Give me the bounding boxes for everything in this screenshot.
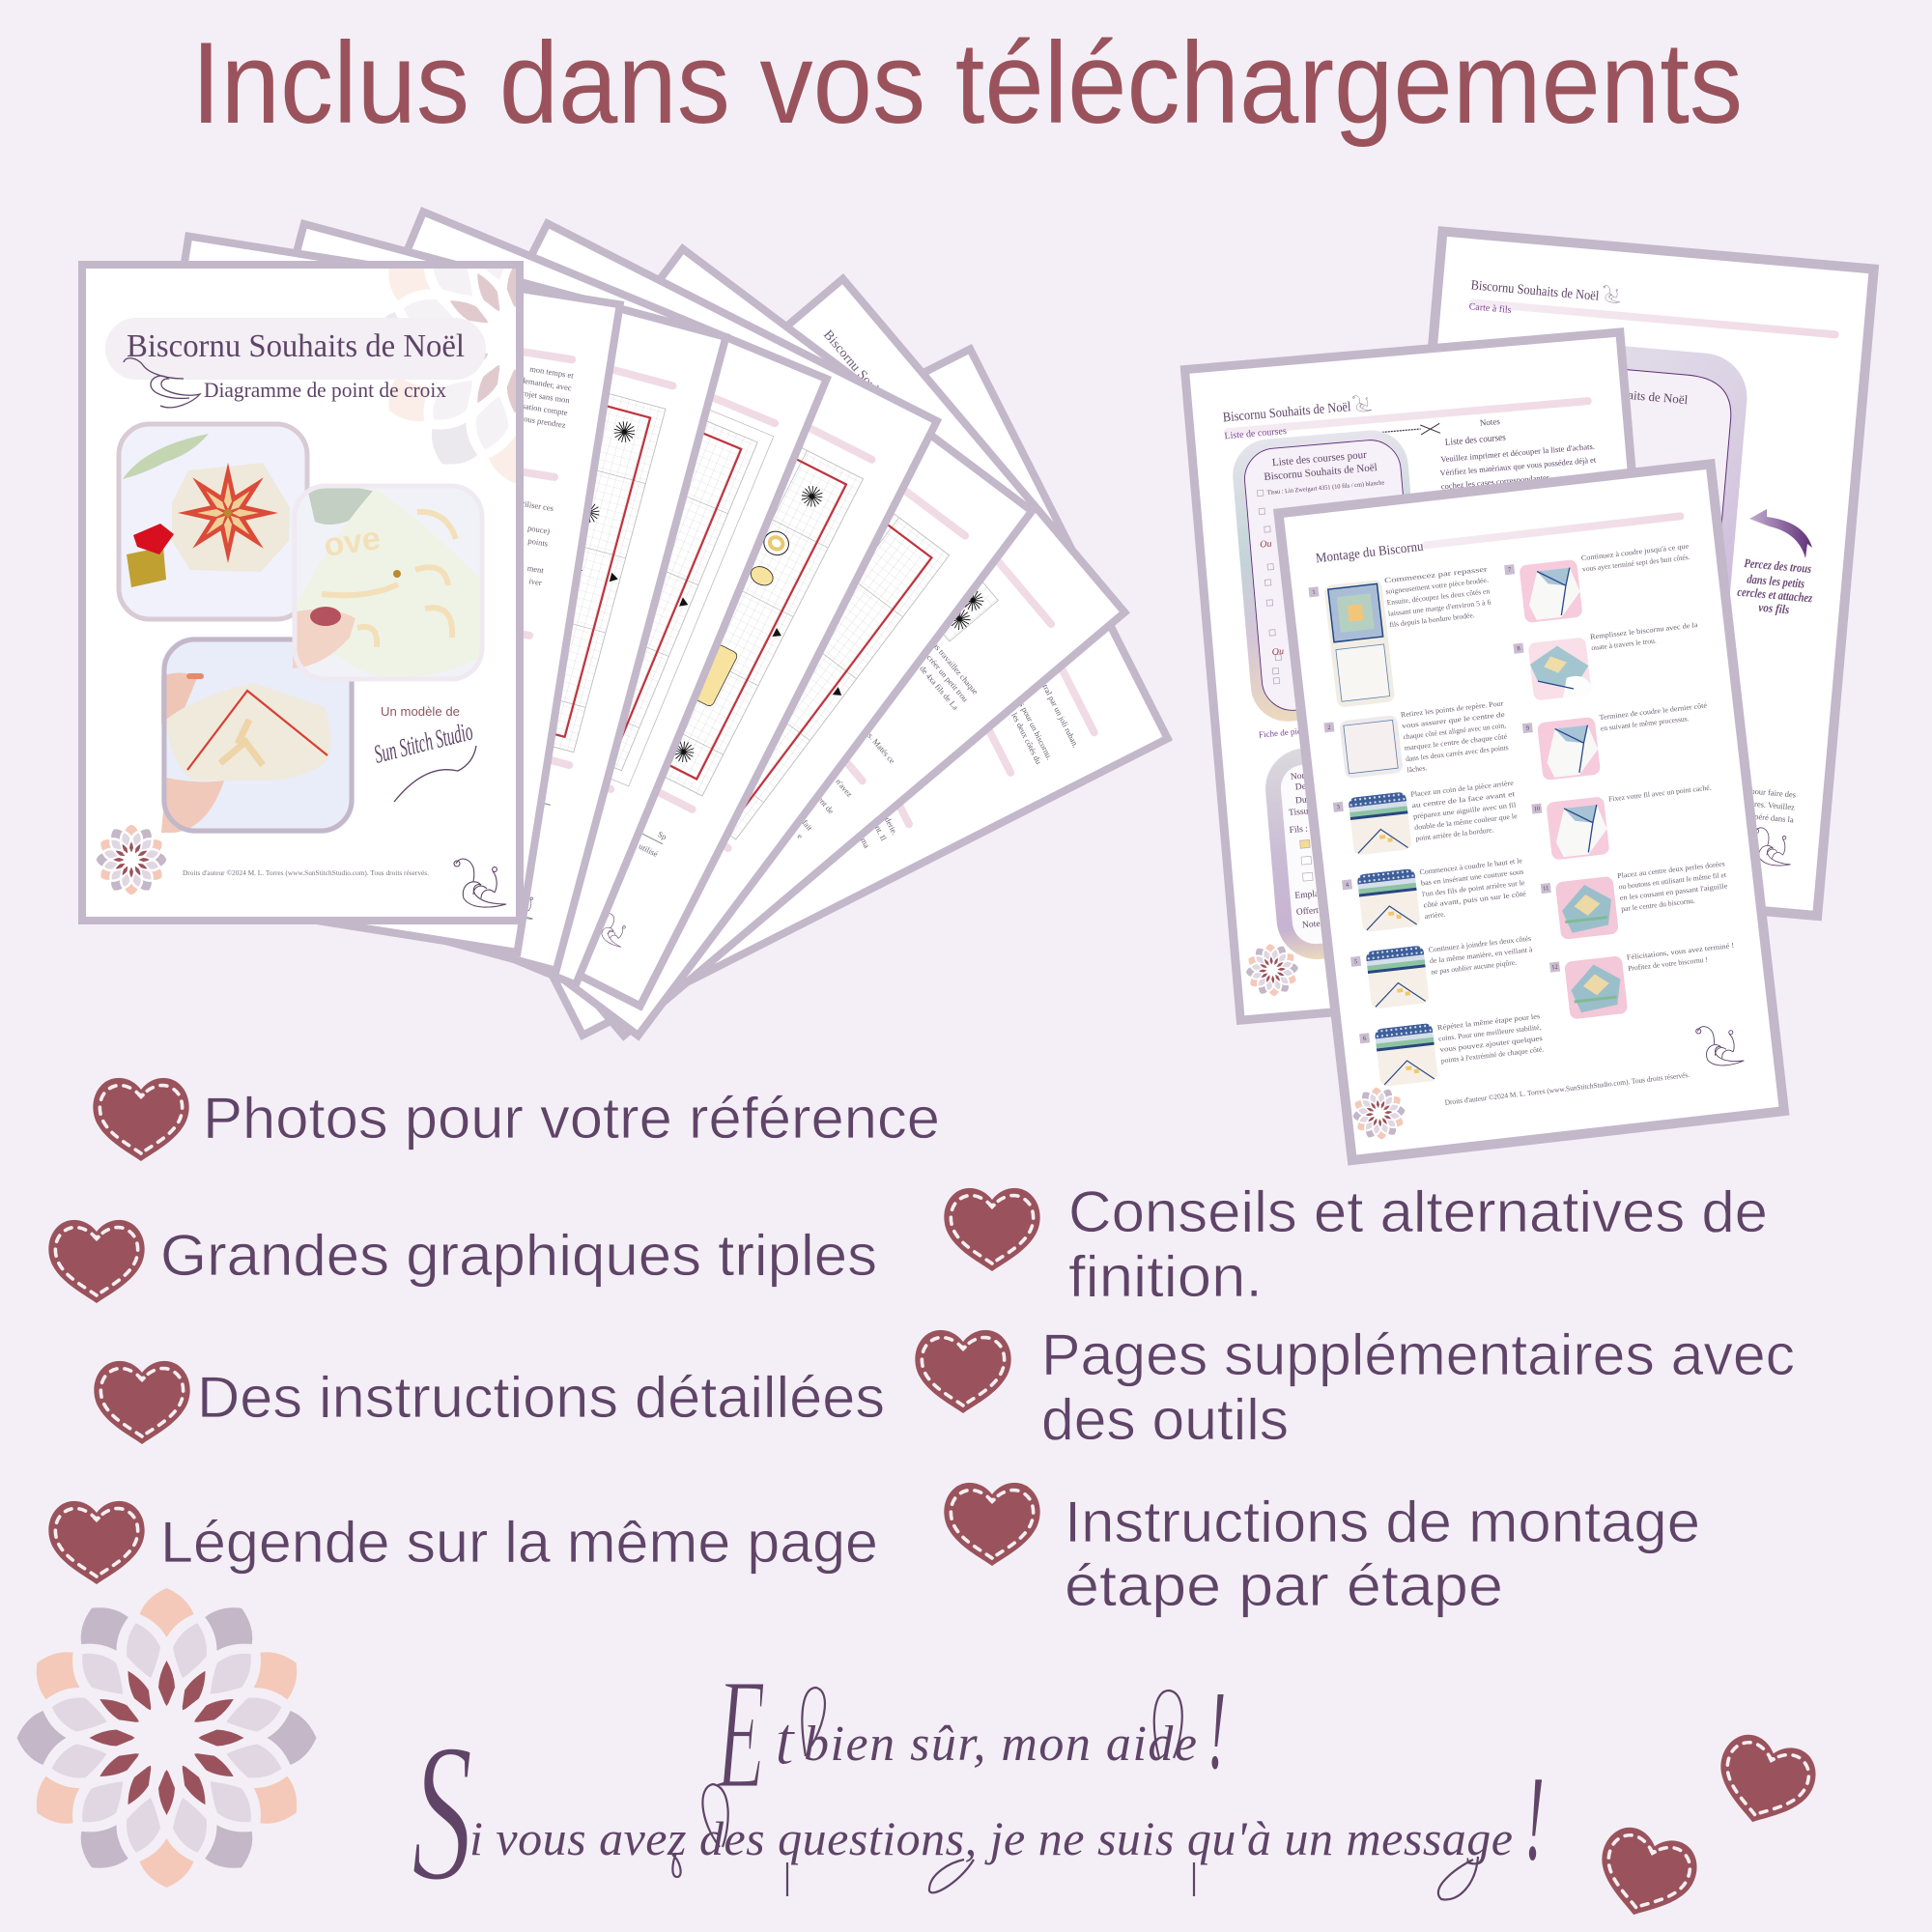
left column instructions: vous pouvez ajouter quelques	[1439, 1034, 1543, 1054]
thread card label: Biscornu Souhaits de Noël	[1553, 381, 1689, 407]
"Ou" labels: Ou	[1260, 539, 1272, 551]
fan page 7: un cordon central par un joli ruban.	[1020, 641, 1081, 749]
shopping list title: Liste des courses pour	[1272, 449, 1368, 469]
notes text	[1437, 425, 1598, 491]
photo 2: love biscornu	[293, 488, 479, 676]
biscornu body	[172, 463, 290, 572]
photo 1 leaves	[123, 434, 209, 479]
assembly copyright: Droits d'auteur ©2024 M. L. Torres (www.SunStitchStudio.com). Tous droits réservés.	[1444, 1070, 1690, 1107]
left column instructions: de la même manière, en veillant à	[1429, 945, 1533, 965]
left column instructions: coins. Pour une meilleure stabilité,	[1438, 1023, 1542, 1043]
fan page 1: pouce)	[527, 523, 551, 536]
right column instructions: ouate à travers le trou.	[1591, 636, 1657, 652]
left column instructions: soigneusement votre pièce brodée.	[1385, 576, 1489, 596]
fan page 1: iver	[528, 576, 543, 587]
pattern sheet rows: De	[1294, 782, 1306, 792]
right column instructions: Félicitations, vous avez terminé !	[1626, 941, 1735, 962]
left column instructions: Commencez à coudre le haut et le	[1419, 856, 1523, 876]
shopping list title: Biscornu Souhaits de Noël	[1264, 462, 1378, 483]
assembly swirl	[1695, 1022, 1745, 1068]
bullet: legend: Légende sur la même page	[160, 1510, 878, 1575]
shopping list rows	[1257, 490, 1284, 684]
fan page 1: ment	[526, 563, 545, 575]
step 8 photo	[1527, 637, 1592, 701]
step number labels: 7	[1508, 566, 1512, 574]
line one	[716, 1647, 1226, 1823]
shopping bar	[1224, 397, 1592, 436]
left column instructions: côté avant, puis un sur le côté	[1423, 889, 1527, 910]
left column instructions: Continuez à joindre les deux côtés	[1428, 934, 1532, 954]
"Ou" labels: Ou	[1271, 646, 1285, 658]
fan page 3	[172, 212, 827, 985]
thread card heading: Biscornu Souhaits de Noël	[1470, 278, 1600, 304]
step number labels: 4	[1346, 882, 1350, 889]
right column instructions: en suivant le même processus.	[1600, 714, 1690, 733]
cover subtitle: Diagramme de point de croix	[204, 378, 446, 402]
pattern sheet rows: Du	[1295, 795, 1307, 806]
fan page 1	[86, 237, 620, 952]
hand-written note	[1737, 555, 1814, 616]
line one: t	[775, 1702, 796, 1779]
pattern sheet heading: Fiche de pièce	[1259, 725, 1309, 739]
step number labels: 11	[1543, 885, 1549, 893]
step 5 photo	[1365, 945, 1430, 1009]
pattern sheet rows: Notes	[1302, 919, 1324, 930]
bullet: legend	[48, 1501, 878, 1584]
photo 2 border	[295, 486, 482, 679]
fan page 7: vraiment. Il	[863, 804, 889, 842]
right column instructions: Remplissez le biscornu avec de la	[1590, 620, 1699, 641]
step number labels: 3	[1336, 804, 1340, 811]
hand-written note: dans les petits	[1747, 571, 1805, 591]
step 4 photo	[1356, 868, 1421, 932]
hand-written note: vos fils	[1758, 600, 1790, 616]
cover sheet	[82, 265, 520, 921]
fan page 6: si vous n'avez	[817, 757, 855, 799]
back page swirl	[1751, 827, 1794, 867]
notes text: Veuillez imprimer et découper la liste d'achats.	[1440, 441, 1595, 464]
front page: biscornu assembly	[1279, 464, 1784, 1160]
dotted cut line and scissors	[1381, 423, 1440, 438]
pattern sheet panel	[1263, 736, 1463, 962]
hand-written arrow	[1749, 509, 1812, 558]
step number labels: 10	[1533, 806, 1541, 812]
cover subtitle ornament	[124, 358, 200, 408]
step 2 photo	[1339, 715, 1404, 779]
"Ou" labels	[1260, 538, 1285, 658]
fan page 6: moment de	[805, 781, 837, 816]
notes text: cochez les cases correspondantes.	[1440, 472, 1551, 491]
fan page 6: e	[795, 832, 806, 840]
right column instructions: ou boutons en utilisant le même fil et	[1618, 870, 1727, 892]
notes text: Vérifiez les matériaux que vous possédez déjà et	[1439, 455, 1597, 477]
pattern sheet swatches	[1300, 839, 1313, 881]
thread card subheading: Carte à fils	[1468, 301, 1512, 316]
fan page 1: projet sans mon	[518, 387, 571, 405]
bullet: tips: finition.	[1068, 1244, 1263, 1309]
"Un modèle de" label: Un modèle de	[381, 704, 460, 719]
bullet: extra pages: des outils	[1041, 1387, 1289, 1452]
fan page 5: o o o	[805, 596, 820, 613]
step 9 photo	[1537, 717, 1601, 781]
fan page 4	[251, 223, 937, 1006]
step number labels: 6	[1363, 1036, 1367, 1042]
left column instructions: l'un des fils de point arrière sur le	[1422, 878, 1526, 898]
bullet: tips: Conseils et alternatives de	[1068, 1179, 1768, 1244]
right column instructions: Continuez à coudre jusqu'à ce que	[1580, 542, 1690, 562]
thread heading ornament	[1602, 285, 1621, 303]
step numbers	[1308, 564, 1566, 1043]
line two	[412, 1702, 1545, 1921]
fan page 4: utilisé	[638, 841, 660, 859]
left column instructions: arrière.	[1424, 910, 1446, 921]
notes text: Liste des courses	[1444, 433, 1506, 448]
right column instructions: Profitez de votre biscornu !	[1628, 955, 1708, 973]
fan of cross-stitch chart pages	[86, 212, 1168, 1036]
fan page 6: Lorsque vous travaillez chaque	[907, 611, 980, 696]
left column instructions: Commencez par repasser	[1384, 564, 1489, 584]
line two: S	[412, 1702, 473, 1921]
line one: bien sûr, mon aide	[804, 1717, 1197, 1772]
cover title: Biscornu Souhaits de Noël	[127, 328, 465, 364]
pages stack: extra tools and assembly	[1184, 232, 1874, 1160]
fan page 1: utiliser ces	[518, 497, 554, 513]
cover corner swirl	[454, 859, 506, 907]
step 6 photo	[1375, 1023, 1438, 1087]
pattern sheet rows	[1285, 769, 1349, 931]
bullet: tips	[944, 1179, 1768, 1309]
step 1 photo	[1323, 580, 1395, 708]
fan page 6: pour créer un petit trou	[914, 639, 971, 704]
photo 2: love biscornu: ove	[322, 520, 383, 564]
fan page 5	[289, 249, 1032, 1036]
fan page 7: broderie.	[878, 806, 900, 837]
left column instructions: points à l'extrémité de chaque côté.	[1440, 1044, 1545, 1065]
right column instructions: vous ayez terminé sept des huit côtés.	[1582, 553, 1690, 574]
step 7 photo	[1519, 559, 1583, 623]
right column instructions: par le centre du biscornu.	[1621, 896, 1695, 913]
step 10 photo	[1546, 796, 1610, 861]
pattern sheet rows: Offert à	[1295, 904, 1326, 918]
bullet: graphs	[48, 1220, 877, 1303]
line two: i vous avez des questions, je ne suis qu'à un message	[469, 1811, 1513, 1865]
back page: thread card: espéré dans la	[1747, 810, 1794, 824]
left column instructions	[1384, 564, 1546, 1065]
bullet: extra pages: Pages supplémentaires avec	[1041, 1322, 1795, 1387]
left column instructions: double de la même couleur que le	[1414, 811, 1519, 832]
thread card subheading bar	[1469, 298, 1839, 339]
left column instructions: point arrière de la bordure.	[1415, 825, 1494, 842]
step 11 photo	[1555, 876, 1619, 940]
left column instructions: Ensuite, découpez les deux côtés en	[1386, 586, 1491, 607]
left column instructions: Retirez les points de repère. Pour	[1400, 698, 1504, 719]
thread cards	[127, 547, 166, 587]
fan page 1: demander, avec	[521, 375, 573, 392]
shopping heading: Biscornu Souhaits de Noël	[1222, 400, 1351, 425]
fan page 1: réalisation compte	[507, 398, 569, 417]
line one: !	[1208, 1669, 1226, 1792]
left column instructions: ne pas oublier aucune piqûre.	[1431, 958, 1518, 977]
pattern sheet rows: Tissu	[1289, 807, 1309, 818]
fan page 1: vous prendrez	[519, 413, 567, 430]
fan page 6: Biscornu Souhaits de Noël	[820, 327, 924, 448]
bullet: graphs: Grandes graphiques triples	[160, 1223, 877, 1288]
fan page 7	[385, 349, 1168, 1036]
bullet: instructions	[94, 1361, 885, 1444]
decorative heart bottom	[1588, 1821, 1704, 1929]
shopping list title	[1263, 448, 1378, 483]
fan page 6: fait	[800, 818, 815, 833]
left column instructions: fils depuis la bordure brodée.	[1389, 611, 1475, 629]
left column instructions: au centre de la face avant et	[1411, 789, 1517, 810]
left column instructions: bas en insérant une couture sous	[1420, 867, 1524, 888]
assembly mandala	[1350, 1085, 1408, 1143]
left column instructions: laissant une marge d'environ 5 à 6	[1388, 598, 1492, 618]
bullet: extra pages	[915, 1322, 1795, 1452]
left column instructions: vous assurer que le centre de	[1402, 710, 1506, 730]
bullet: instructions: Des instructions détaillées	[197, 1365, 885, 1430]
hand-written note: cercles et attachez	[1737, 584, 1814, 605]
left column instructions: dans les deux carrés avec des points	[1406, 743, 1509, 763]
cover copyright: Droits d'auteur ©2024 M. L. Torres (www.SunStitchStudio.com). Tous droits réservés.	[183, 869, 429, 877]
step number labels: 8	[1517, 645, 1520, 652]
fan page 6: autres points. Matés ce	[841, 701, 897, 765]
step number labels: 5	[1354, 958, 1358, 965]
title: Inclus dans vos téléchargements	[191, 18, 1743, 148]
left column instructions: Placez un coin de la pièce arrière	[1410, 779, 1515, 799]
thread card inner panel	[1460, 358, 1734, 820]
left column instructions: chaque côté est aligné avec un coin,	[1403, 721, 1506, 741]
script message	[412, 1647, 1545, 1921]
large mandala	[17, 1588, 317, 1888]
pattern sheet rows: Emplacement	[1294, 887, 1346, 901]
hand-written note: Percez des trous	[1744, 555, 1812, 576]
back page: thread card: tures. Veuillez	[1747, 798, 1796, 812]
fan page 7: Assemblent les deux côtés du	[991, 674, 1044, 766]
middle page: shopping list	[1184, 332, 1676, 1020]
right column instructions: Placez au centre deux perles dorées	[1617, 859, 1725, 880]
assembly heading: Montage du Biscornu	[1315, 540, 1424, 566]
back page: thread card	[1386, 232, 1874, 916]
shopping heading ornament	[1352, 394, 1372, 412]
photo 1: red star biscornu	[119, 424, 307, 619]
pattern sheet inner	[1279, 752, 1467, 946]
fan page 2	[134, 224, 725, 971]
arrow caption lines end: pour faire des	[1750, 786, 1796, 800]
step number labels: 2	[1327, 724, 1331, 731]
bullet: photos	[93, 1078, 940, 1161]
right column instructions: en les cousant en passant l'aiguille	[1619, 881, 1728, 902]
left column instructions: Répétez la même étape pour les	[1436, 1011, 1541, 1032]
cover title pill	[105, 318, 486, 380]
cover mandala	[97, 825, 166, 895]
bullet: assembly: Instructions de montage	[1065, 1490, 1700, 1554]
shopping subheading: Liste de courses	[1224, 426, 1287, 441]
step number labels	[1312, 566, 1564, 1042]
shopping page mandala	[1244, 942, 1300, 999]
left column instructions: préparez une aiguille avec un fil	[1412, 801, 1517, 821]
fan page 6: fil et de 4xa fils de La	[907, 650, 961, 712]
bullet: photos: Photos pour votre référence	[203, 1086, 940, 1151]
cover page	[82, 193, 660, 921]
shopping list first row: Tissu : Lin Zweigart 4351 (10 fils / cm) blanche	[1266, 479, 1385, 497]
fan page 1: mon temps et	[529, 364, 575, 381]
step number labels: 9	[1525, 724, 1529, 732]
fan page 6	[339, 276, 1124, 1036]
line one: E	[716, 1647, 765, 1823]
shopping list panel	[1230, 427, 1429, 724]
shopping list inner	[1242, 438, 1421, 713]
fan page 7: ma	[859, 837, 872, 850]
right column instructions: Terminez de coudre le dernier côté	[1599, 700, 1708, 722]
designer signature	[371, 717, 476, 802]
fan page 7: Ces fils pour un biscornu.	[1008, 681, 1055, 761]
line two: !	[1524, 1752, 1545, 1886]
pattern sheet rows: Nom	[1291, 771, 1310, 782]
decorative heart top	[1707, 1728, 1823, 1836]
right column instructions: Fixez votre fil avec un point caché.	[1608, 783, 1712, 804]
bullet: assembly: étape par étape	[1065, 1553, 1503, 1618]
fan page 4: Sp	[656, 829, 668, 841]
photo 3 border	[164, 639, 352, 831]
thread card panel	[1446, 334, 1750, 819]
bullet: assembly	[944, 1483, 1700, 1618]
designer signature: Sun Stitch Studio	[371, 717, 475, 769]
step number labels: 12	[1551, 964, 1558, 971]
left column instructions: lâches.	[1406, 763, 1428, 775]
red eight-point star	[178, 463, 278, 563]
photo 3: biscornu in hand	[161, 637, 355, 834]
step 3 photo	[1348, 791, 1412, 856]
right column instructions	[1580, 541, 1737, 973]
step 12 photo	[1564, 955, 1628, 1020]
left column instructions: marquez le centre de chaque côté	[1404, 732, 1508, 753]
notes heading: Notes	[1479, 416, 1501, 428]
fan page 1: points	[527, 535, 549, 549]
pattern sheet rows: Fils :	[1289, 825, 1308, 836]
step number labels: 1	[1312, 589, 1316, 596]
assembly bar	[1422, 512, 1685, 550]
cover watermark mandala	[384, 269, 516, 483]
